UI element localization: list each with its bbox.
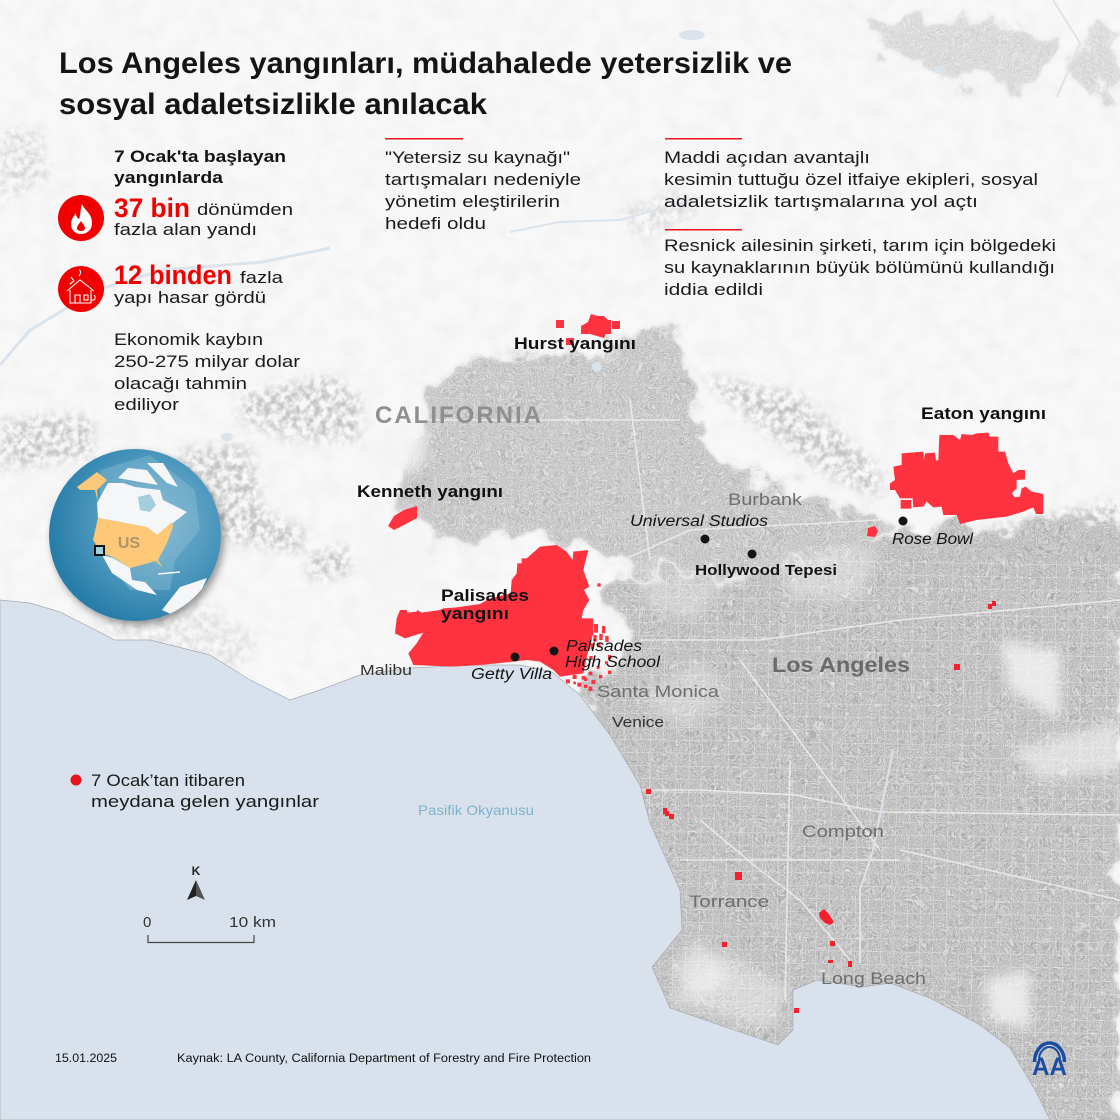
label: Kenneth: Kenneth yangını — [357, 483, 503, 501]
canada — [97, 483, 187, 535]
baffin island — [147, 463, 178, 487]
label: Malibu: Malibu — [360, 662, 412, 679]
label: Los Angeles: Los Angeles — [772, 654, 910, 677]
icon: flame — [58, 195, 104, 241]
label: Torrance: Torrance — [689, 892, 769, 911]
stat: 37 bin: dönümden — [197, 200, 293, 219]
scale bar — [143, 914, 276, 942]
alaska — [77, 472, 107, 503]
text: economic loss: 250-275 milyar dolar — [114, 352, 300, 371]
mexico and central america — [102, 555, 157, 595]
scale bar: 10 km — [229, 914, 276, 931]
valley base tone — [400, 20, 1115, 575]
north arrow — [187, 864, 205, 900]
place: Palisades High School: High School — [565, 654, 661, 671]
text: economic loss — [114, 330, 300, 414]
footer: source: Kaynak: LA County, California Department of Forestry and Fire Protection — [177, 1053, 591, 1065]
text block: Resnick family: Resnick ailesinin şirketi, tarım için bölgedeki — [664, 236, 1056, 255]
text block: water supply: "Yetersiz su kaynağı" — [385, 148, 570, 167]
text block: private firefighters — [664, 138, 1038, 211]
text block: Resnick family — [664, 229, 1056, 299]
place: Getty Villa — [471, 652, 552, 683]
freeways — [420, 400, 1120, 1000]
label: Burbank: Burbank — [728, 490, 803, 509]
light open patches — [365, 430, 1120, 1030]
title: sosyal adaletsizlikle anılacak — [59, 88, 487, 121]
valley city texture — [400, 20, 1115, 575]
place: Palisades High School: Palisades — [566, 638, 642, 655]
north arrow: K — [192, 864, 201, 878]
legend — [70, 771, 319, 811]
legend: meydana gelen yangınlar — [91, 792, 319, 811]
label: Palisades: yangını — [441, 605, 509, 623]
basin city texture — [590, 520, 1120, 1120]
locator square — [95, 546, 104, 555]
text block: private firefighters: kesimin tuttuğu özel itfaiye ekipleri, sosyal — [664, 170, 1038, 189]
place: Rose Bowl: Rose Bowl — [892, 531, 974, 548]
footer: date: 15.01.2025 — [55, 1053, 117, 1065]
globe locator — [49, 449, 221, 621]
stat: 12 binden — [114, 260, 284, 307]
hills and mountain shading — [0, 130, 1120, 670]
logo: AA: AA — [1032, 1053, 1067, 1081]
fire: Hurst — [556, 314, 620, 345]
heading: 7 Ocak: yangınlarda — [114, 169, 224, 187]
place: Hollywood Tepesi — [695, 550, 837, 579]
legend: 7 Ocak’tan itibaren — [91, 771, 245, 790]
label: Compton: Compton — [802, 822, 884, 841]
ocean shelf — [100, 455, 200, 590]
place: Universal Studios: Universal Studios — [630, 513, 768, 530]
stat: 37 bin: fazla alan yandı — [114, 220, 257, 239]
fire: Palisades — [395, 545, 611, 691]
small fires across the basin — [646, 601, 996, 1013]
south america — [162, 578, 207, 615]
stat: 12 binden: fazla — [240, 268, 284, 287]
hudson bay — [138, 494, 156, 512]
text: economic loss: olacağı tahmin — [114, 374, 247, 393]
arctic islands — [118, 468, 158, 485]
place: Universal Studios — [630, 513, 768, 544]
stat: 12 binden: 12 binden — [114, 260, 232, 290]
place: Hollywood Tepesi: Hollywood Tepesi — [695, 562, 837, 579]
heading: 7 Ocak — [114, 148, 286, 187]
urban areas with irregular edges — [400, 20, 1120, 1120]
text block: Resnick family: iddia edildi — [664, 280, 763, 299]
label: Palisades: Palisades — [441, 587, 529, 605]
label: Santa Monica: Santa Monica — [597, 682, 720, 701]
street grid — [610, 560, 1120, 1120]
fire: Eaton — [867, 433, 1043, 537]
basin base tone — [590, 520, 1120, 1120]
heading: 7 Ocak: 7 Ocak'ta başlayan — [114, 148, 286, 166]
small fire west of Rose Bowl — [867, 526, 878, 537]
text block: water supply: tartışmaları nedeniyle — [385, 170, 581, 189]
text block: private firefighters: adaletsizlik tartışmalarına yol açtı — [664, 192, 978, 211]
stat: 37 bin: 37 bin — [114, 193, 190, 223]
burn scatter squares — [566, 583, 611, 691]
place: Rose Bowl — [892, 516, 974, 548]
label: Long Beach: Long Beach — [821, 969, 926, 988]
label: Hurst: Hurst yangını — [514, 335, 636, 353]
stat: 37 bin — [114, 193, 293, 239]
place: Getty Villa: Getty Villa — [471, 666, 552, 683]
icon: burning house — [58, 266, 104, 312]
scale bar: 0 — [143, 914, 151, 931]
label: Palisades — [441, 587, 529, 623]
US label: US — [118, 535, 140, 552]
label: Eaton: Eaton yangını — [921, 405, 1046, 423]
text block: water supply: yönetim eleştirilerin — [385, 192, 560, 211]
stat: 12 binden: yapı hasar gördü — [114, 288, 266, 307]
text block: water supply — [385, 138, 581, 233]
panel: key figures — [58, 148, 300, 414]
label: CALIFORNIA: CALIFORNIA — [375, 402, 541, 429]
fire: Kenneth — [388, 506, 417, 530]
text block: water supply: hedefi oldu — [385, 214, 486, 233]
label: Venice: Venice — [612, 714, 664, 731]
caribbean — [158, 572, 180, 574]
text block: private firefighters: Maddi açıdan avantajlı — [664, 148, 870, 167]
place: Palisades High School — [550, 638, 661, 671]
title: Los Angeles yangınları, müdahalede yetersizlik ve — [59, 47, 792, 80]
ocean — [0, 600, 1050, 1120]
label: Pacific Ocean: Pasifik Okyanusu — [418, 802, 534, 818]
text: economic loss: ediliyor — [114, 395, 179, 414]
text: economic loss: Ekonomik kaybın — [114, 330, 263, 349]
text block: Resnick family: su kaynaklarının büyük bölümünü kullandığı — [664, 258, 1055, 277]
united states — [93, 518, 173, 568]
title — [59, 47, 792, 121]
